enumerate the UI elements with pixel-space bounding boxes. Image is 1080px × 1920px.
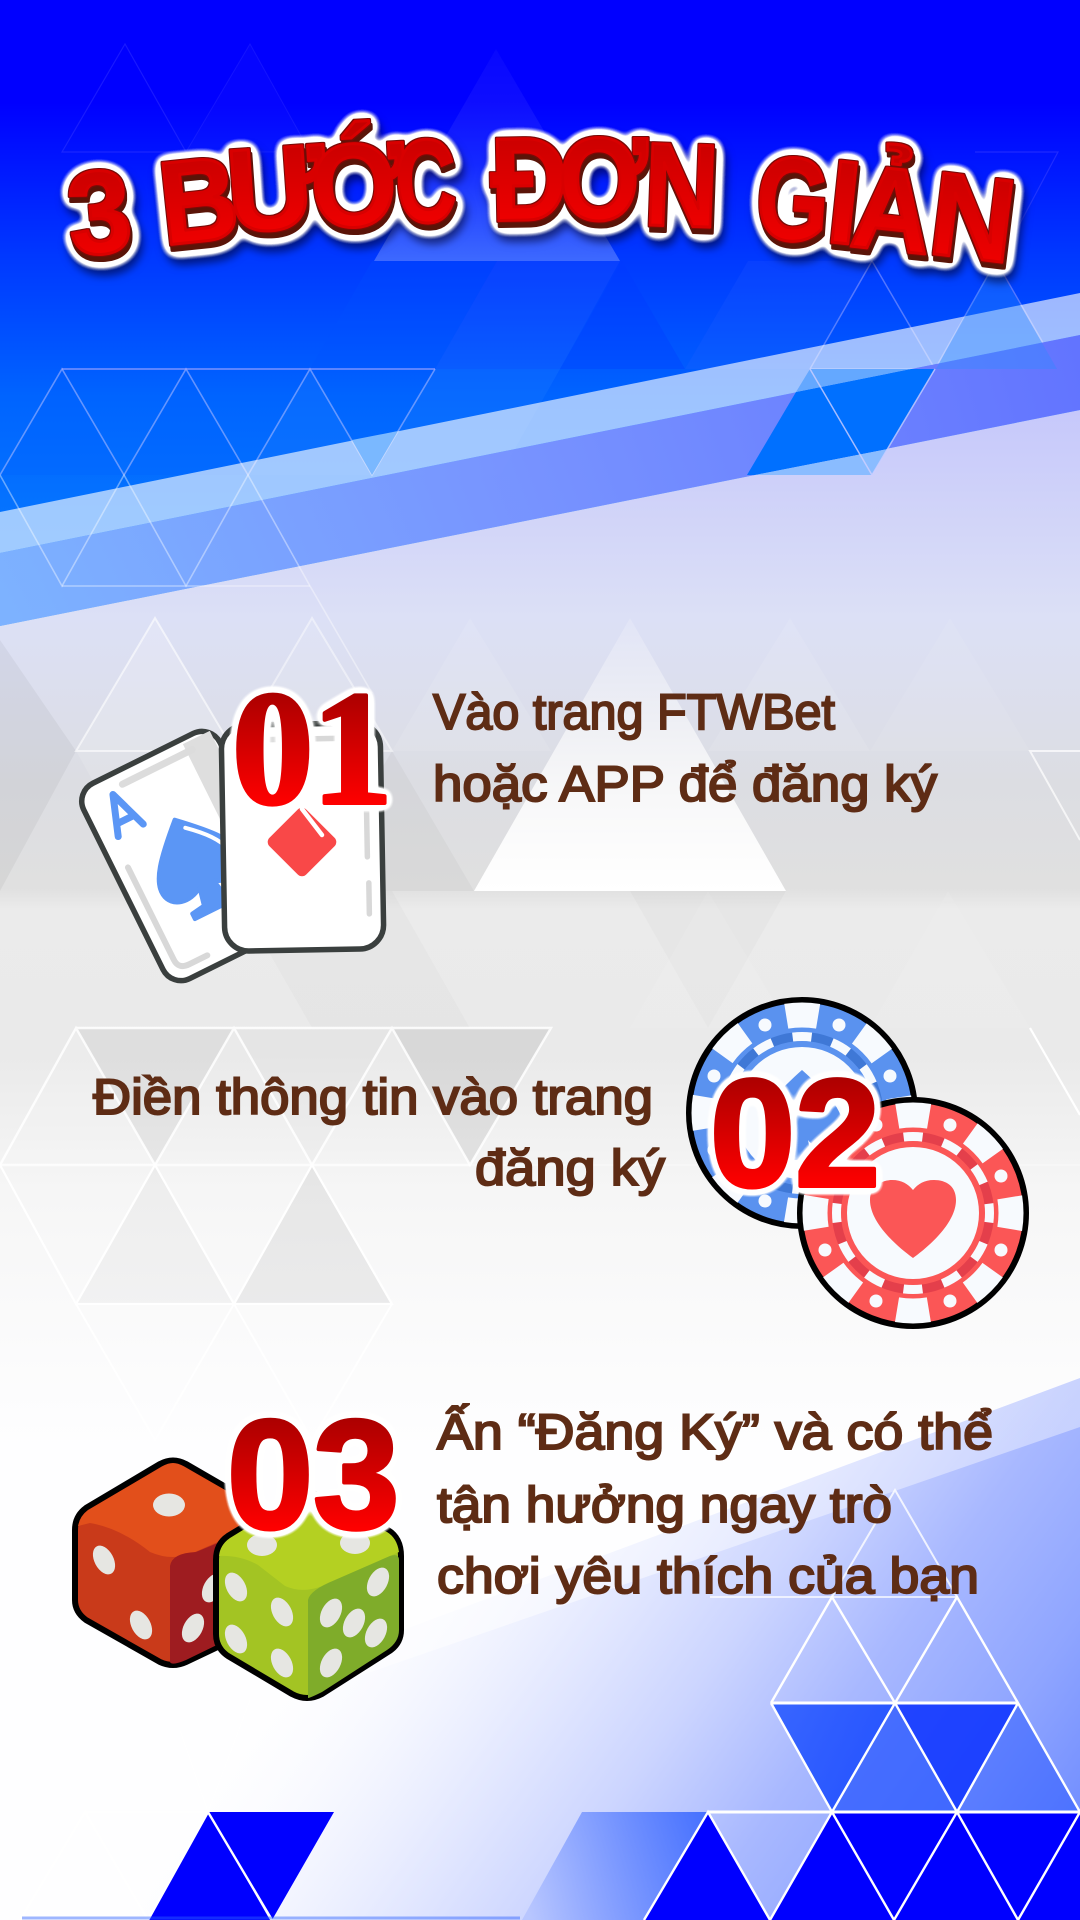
title: 3 [62, 144, 137, 281]
step 3 text: Ấn “Đăng Ký” và có thể [437, 1404, 993, 1460]
title: C [393, 114, 458, 248]
number badge 02: 02 [710, 1048, 880, 1219]
title: N [923, 147, 1023, 288]
title: N [642, 119, 721, 253]
diagonal band: mid tone [0, 335, 1080, 626]
triangle pattern: middle grey section [0, 618, 1080, 1440]
diagonal band: light stripe [0, 293, 1080, 553]
icon: green die [216, 1492, 401, 1698]
title: B [153, 131, 244, 270]
step 1 text [433, 684, 937, 812]
step 3 text: tận hưởng ngay trò [437, 1477, 892, 1533]
triangle: bright blue shape crossing bands [352, 261, 1057, 475]
icon: red casino chip [800, 1100, 1026, 1326]
number badge 01: 01 [232, 659, 391, 839]
title: Ả [846, 140, 939, 280]
number badge 03: 03 [227, 1388, 399, 1561]
step 2 text: Điền thông tin vào trang [93, 1069, 653, 1125]
icon: red die [75, 1460, 273, 1665]
paper background lower area [0, 410, 1080, 1920]
triangle pattern: bottom blue section [20, 1490, 1080, 1920]
step 1 text: Vào trang FTWBet [433, 684, 835, 740]
icon: blue casino chip [689, 1000, 915, 1226]
panel: step 3 [75, 1388, 993, 1698]
triangle pattern: upper left crossing the band [0, 475, 372, 693]
triangle pattern: top blue section [0, 44, 1058, 475]
title: Ớ [307, 117, 409, 254]
icon: playing cards [75, 723, 384, 987]
step 2 text [93, 1069, 665, 1196]
panel: step 1 [75, 659, 937, 987]
step 3 text [437, 1404, 993, 1604]
title: Đ [490, 112, 569, 246]
title [62, 112, 1023, 288]
title: Ư [222, 119, 331, 258]
title: Ơ [558, 113, 648, 245]
title: G [752, 131, 833, 268]
title: I [822, 136, 866, 270]
step 1 text: hoặc APP để đăng ký [433, 756, 937, 812]
step 2 text: đăng ký [475, 1140, 665, 1196]
step 3 text: chơi yêu thích của bạn [437, 1548, 979, 1604]
background: bottom blue gradient [0, 1378, 1080, 1920]
panel: step 2 [93, 1000, 1026, 1326]
